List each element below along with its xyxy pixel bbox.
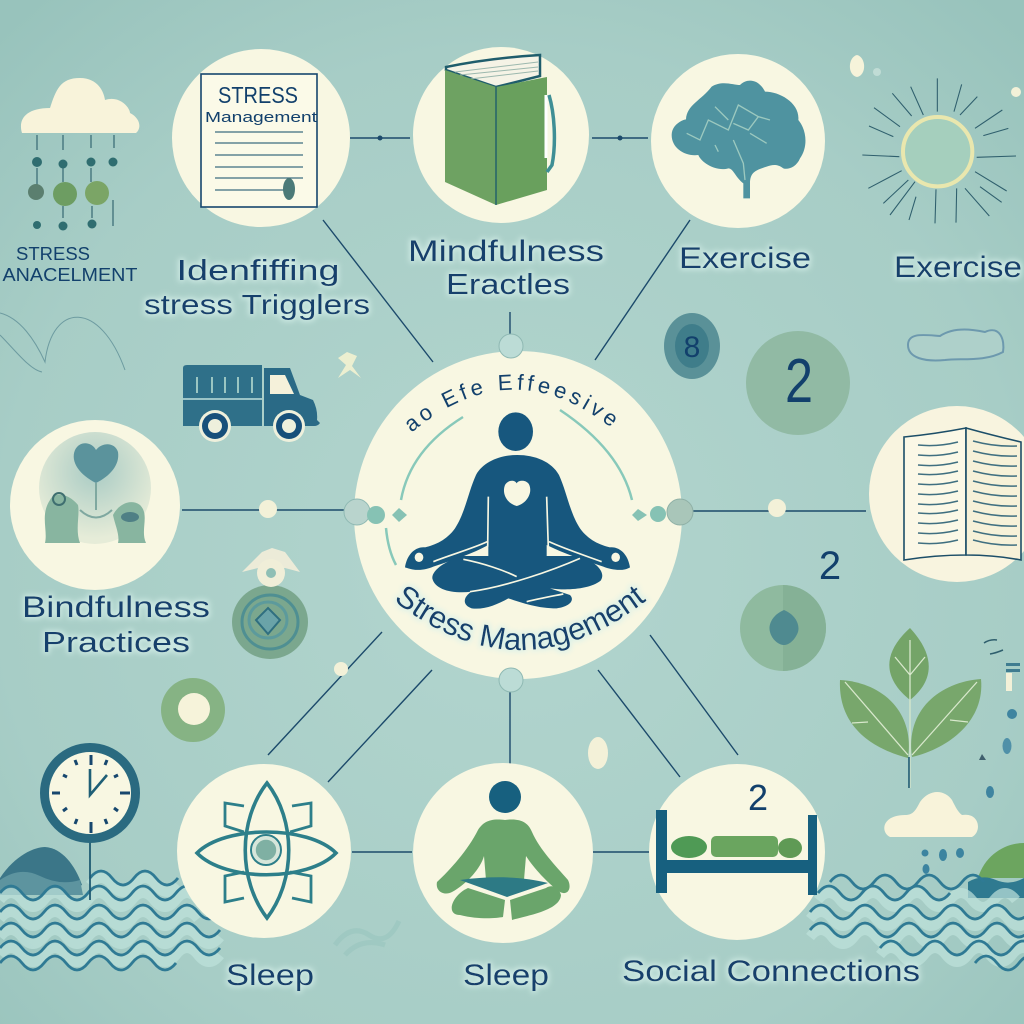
decorative hills left [0,313,125,372]
panel: stress triggers [144,49,370,320]
label line two: stress Trigglers [144,289,370,320]
icon: small star [338,352,361,378]
label: Sleep [226,959,314,992]
connector dots [259,136,786,769]
icon: green book [445,55,554,205]
central curved caption: ao Efe Effeesive [406,374,616,432]
faint left label: ANACELMENT [2,265,138,285]
panel: mindfulness eractles [408,47,604,301]
panel: sleep figure [413,763,593,992]
icon: atom flower [197,783,336,918]
icon: truck [183,365,320,442]
icon: sun [862,78,1016,223]
label: Sleep [463,959,549,992]
label: Social Connections [622,955,920,988]
panel: bed [622,764,920,988]
icon: small marks right edge [979,640,1020,798]
label line two: Eractles [446,269,570,301]
icon: open book [904,428,1021,560]
label: Exercise [679,242,811,275]
icon: bottom-right cloud [884,792,978,874]
decorative cloud scribble [908,330,1003,360]
icon: meditating figure [405,412,630,609]
badge: number two: 2 [785,347,813,416]
panel: sleep flower [177,764,351,992]
label: Idenfiffing [176,255,340,287]
badge: number two [746,331,850,435]
icon: document [201,74,318,207]
number: 2 [748,777,768,818]
icon: document: STRESS [218,82,298,108]
decorative hill and waves right [810,843,1024,970]
faint left label top: STRESS [16,244,90,264]
label: exercise right: Exercise [894,251,1022,284]
number: z-shaped two: 2 [819,544,841,588]
icon: droplets top right [850,55,1021,97]
icon: leaves [840,628,981,788]
icon: dark oval badge [664,313,720,379]
icon: green meditating figure [437,781,570,920]
panel: central circle [354,351,682,679]
icon: clock [44,748,136,900]
panel: exercise brain tree [651,54,825,275]
icon: green ring [161,678,225,742]
icon: bed [656,810,817,895]
central side arcs [386,410,632,565]
icon: cloud with drops top-left [21,78,139,230]
central title: Stress Management [394,584,648,654]
badge: lower right [740,585,826,671]
panel: bindfulness [10,420,210,659]
decorative hill and waves left [0,847,399,970]
connector lines [182,138,866,852]
icon: document: Management [205,109,318,126]
panel: open book [869,406,1024,582]
icon: heads with heart [39,432,151,544]
icon: brain tree [672,81,805,198]
label line two: Practices [42,627,190,659]
icon: concentric spiral [232,548,308,659]
label: Mindfulness [408,235,604,268]
label: Bindfulness [22,591,210,624]
icon: dark oval badge: 8 [684,331,700,364]
